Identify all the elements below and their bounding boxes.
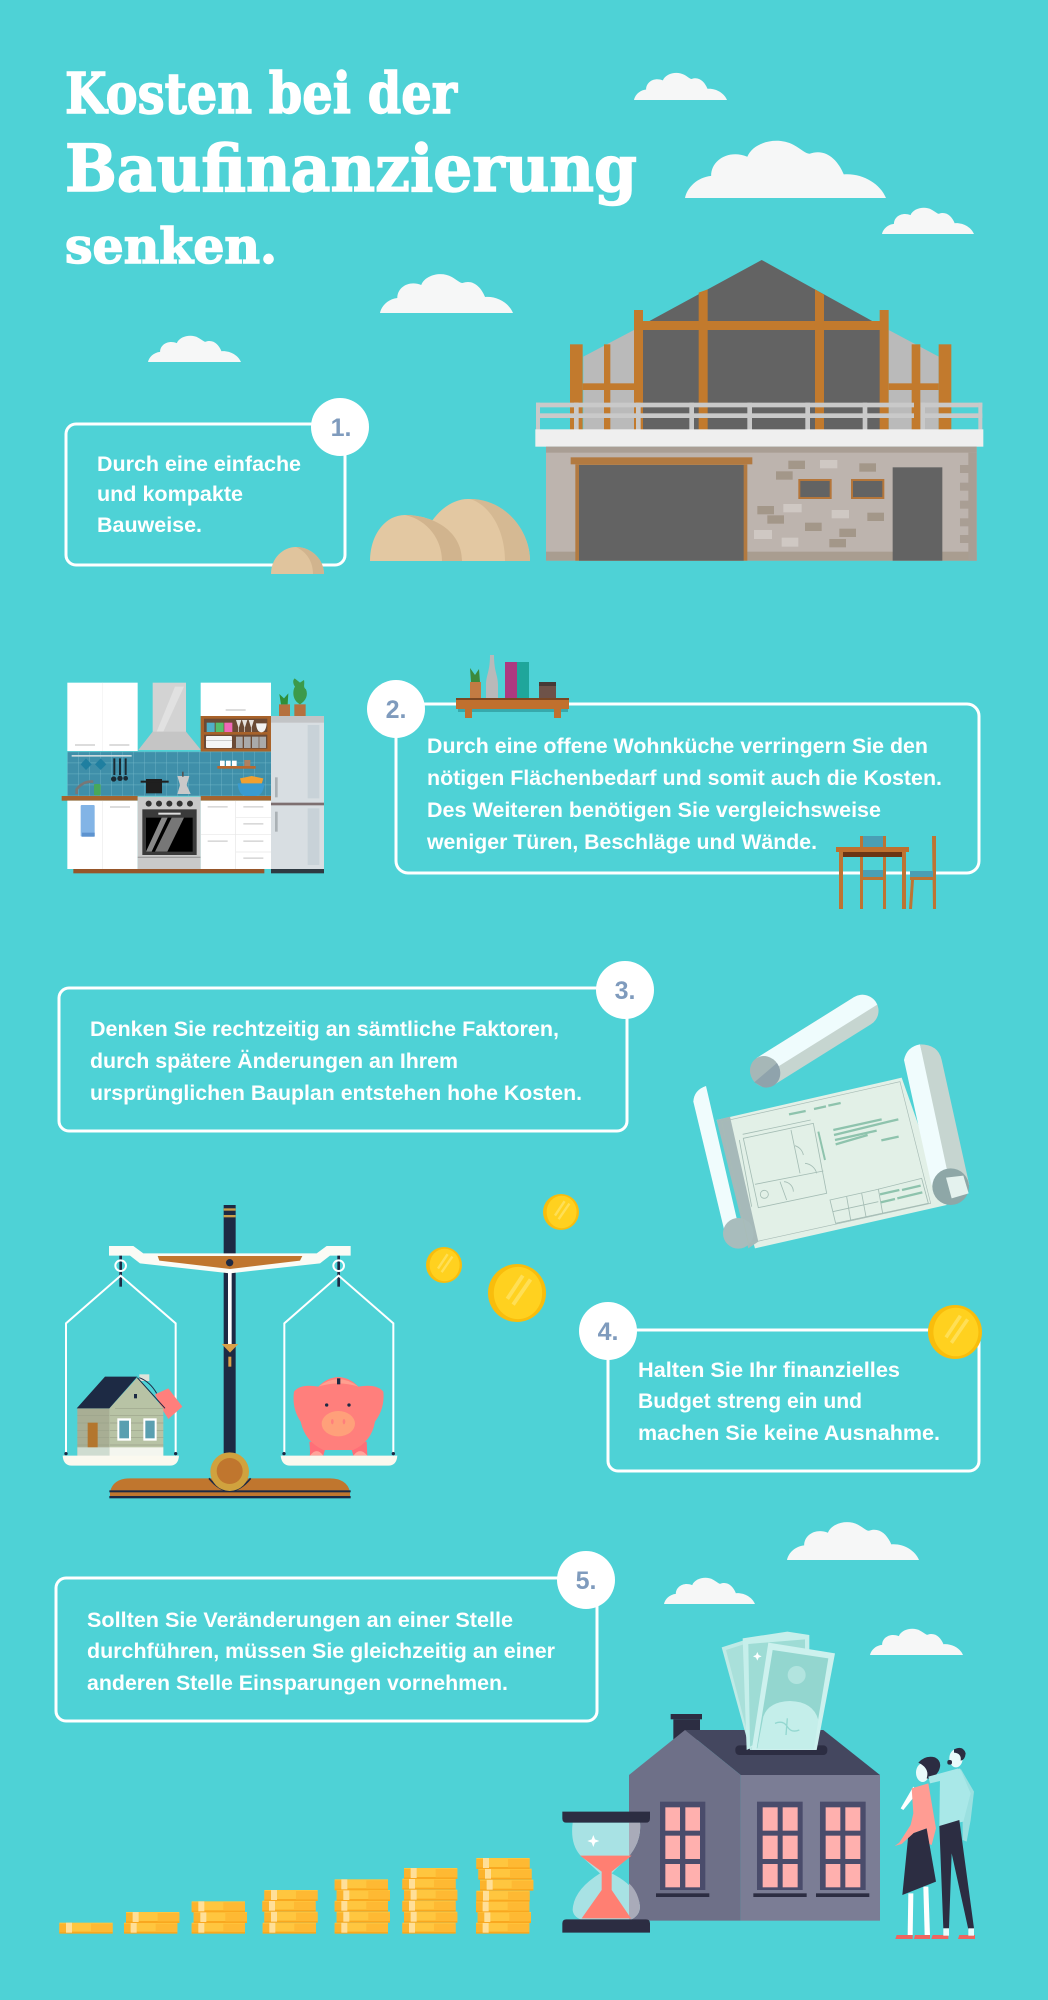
text 5 (87, 1609, 555, 1695)
illustration: unfinished house (535, 260, 983, 561)
number badge 3: 3. (615, 977, 635, 1005)
number badge 2: 2. (386, 696, 406, 724)
text 4: Budget streng ein und (638, 1390, 862, 1413)
icon: small rock (271, 547, 324, 574)
panel 3 (59, 961, 654, 1131)
panel 5 (56, 1551, 615, 1721)
text 4: Halten Sie Ihr finanzielles (638, 1359, 900, 1382)
panel 2 (367, 655, 979, 909)
number badge 1 (311, 398, 369, 456)
scale strings (66, 1256, 393, 1453)
stack 4 (262, 1890, 318, 1934)
number badge 4 (579, 1302, 637, 1360)
number badge 5: 5. (576, 1567, 596, 1595)
text 2 (426, 735, 942, 854)
number badge 4: 4. (598, 1318, 618, 1346)
text 2: weniger Türen, Beschläge und Wände. (426, 831, 817, 854)
stack 2 (124, 1912, 179, 1934)
box 2 (396, 704, 979, 873)
text 5: Sollten Sie Veränderungen an einer Stelle (87, 1609, 513, 1632)
blueprint sheet (693, 1044, 969, 1249)
text 5: durchführen, müssen Sie gleichzeitig an einer (87, 1640, 555, 1663)
text 2: Des Weiteren benötigen Sie vergleichsweise (427, 799, 881, 822)
text 1: Bauweise. (97, 514, 202, 537)
scale pans (63, 1452, 397, 1466)
text 3: ursprünglichen Bauplan entstehen hohe Kosten. (90, 1082, 582, 1105)
text 1: und kompakte (97, 483, 243, 506)
illustration: kitchen (62, 678, 324, 873)
panel 1 (66, 398, 369, 574)
icon: dining table and chairs (836, 836, 936, 909)
box 3 (59, 988, 627, 1131)
number badge 5 (557, 1551, 615, 1609)
text 3: durch spätere Änderungen an Ihrem (90, 1050, 458, 1073)
icon: wall shelf (456, 655, 569, 718)
title: Kosten bei der (65, 61, 458, 127)
text 5: anderen Stelle Einsparungen vornehmen. (87, 1672, 508, 1695)
money slot (735, 1745, 827, 1755)
woman (895, 1757, 940, 1939)
house body (629, 1730, 880, 1921)
mini house with price tag (77, 1374, 182, 1457)
text 2: Durch eine offene Wohnküche verringern Sie den (427, 735, 928, 758)
stack 7 (476, 1858, 533, 1934)
chimney (671, 1714, 702, 1740)
clouds bottom (664, 1522, 963, 1655)
scale base (109, 1452, 351, 1498)
illustration: piggy house with money (562, 1632, 975, 1939)
box 4 (608, 1330, 979, 1471)
text 3 (90, 1018, 582, 1105)
box 5 (56, 1578, 597, 1721)
illustration: large rocks (370, 499, 530, 561)
illustration: floating coins (426, 1194, 579, 1322)
text 1: Durch eine einfache (97, 453, 301, 476)
clouds top (148, 73, 974, 362)
scale beam (109, 1246, 351, 1367)
title: senken. (65, 217, 277, 275)
text 3: Denken Sie rechtzeitig an sämtliche Faktoren, (90, 1018, 559, 1041)
number badge 3 (596, 961, 654, 1019)
number badge 2 (367, 680, 425, 738)
piggy bank (294, 1377, 384, 1456)
stack 5 (335, 1879, 390, 1934)
text 4: machen Sie keine Ausnahme. (638, 1422, 940, 1445)
text 4 (638, 1359, 940, 1445)
banknotes (722, 1632, 835, 1750)
text 2: nötigen Flächenbedarf und somit auch die Kosten. (427, 767, 942, 790)
title (65, 61, 637, 275)
title: Baufinanzierung (65, 131, 637, 207)
box 1 (66, 424, 345, 565)
rolled blueprint (744, 989, 885, 1093)
number badge 1: 1. (331, 414, 351, 442)
hourglass (562, 1812, 650, 1933)
icon: coin (928, 1305, 982, 1359)
text 1 (97, 453, 301, 537)
illustration: growing coin stacks (59, 1858, 533, 1934)
stack 6 (402, 1868, 457, 1934)
windows (656, 1802, 869, 1897)
man (928, 1748, 975, 1939)
scale post (224, 1205, 236, 1453)
panel 4 (579, 1302, 982, 1471)
stack 3 (192, 1901, 247, 1934)
illustration: blueprint (693, 989, 969, 1249)
stack 1 (59, 1923, 113, 1934)
illustration: balance scale (63, 1205, 397, 1498)
